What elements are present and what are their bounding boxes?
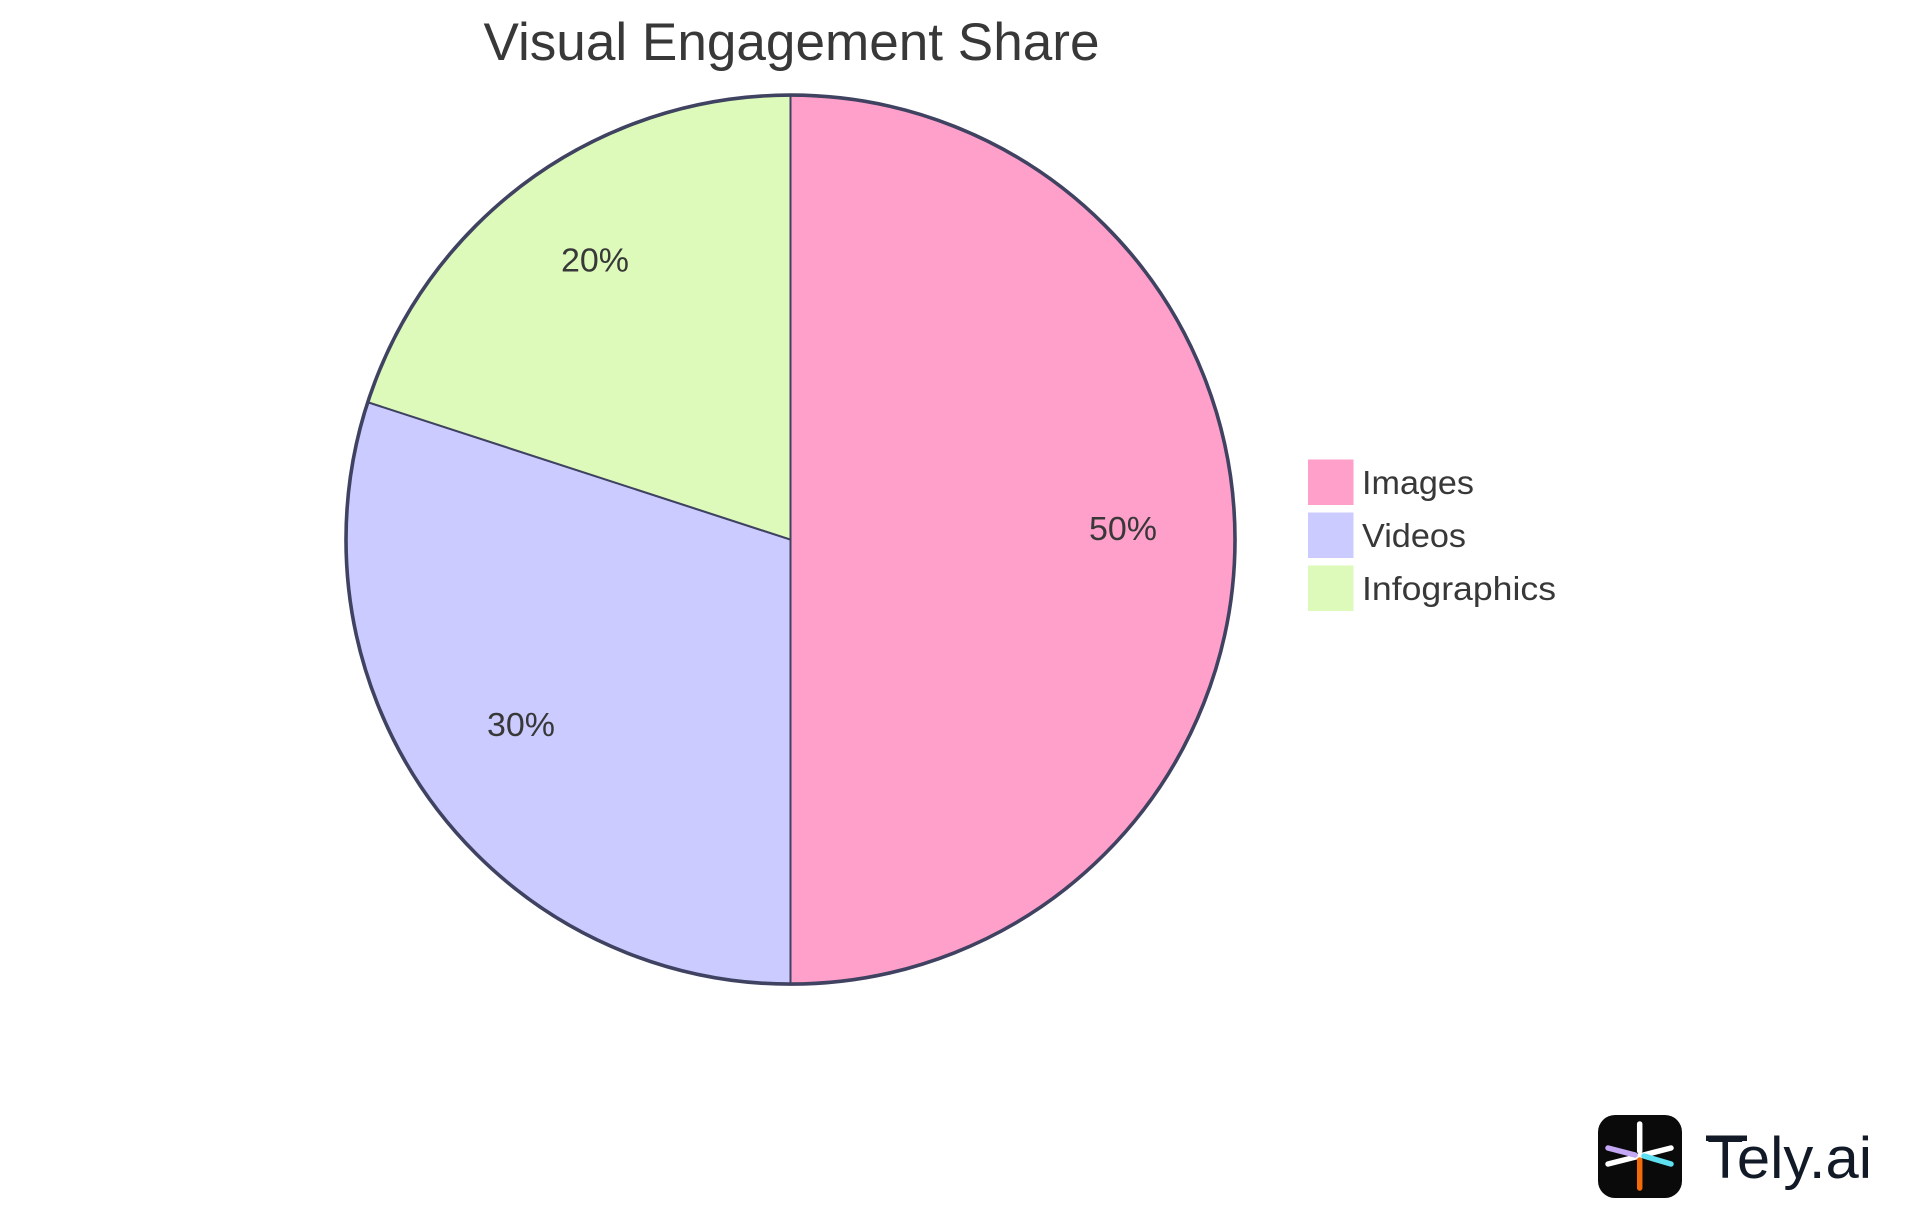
legend item: Infographics	[1308, 566, 1556, 611]
slice: Infographics 20%	[368, 95, 790, 540]
logo: Tely.ai	[1598, 1115, 1872, 1198]
legend item: Videos	[1308, 512, 1466, 558]
label: 30%: 30%	[487, 707, 555, 744]
slice: Videos 30%	[346, 402, 790, 984]
title: Visual Engagement Share	[484, 13, 1100, 72]
legend item: Images: Images	[1362, 465, 1474, 502]
label: 50%: 50%	[1089, 511, 1157, 548]
slice: Images 50%	[790, 95, 1235, 984]
legend item: Videos: Videos	[1362, 518, 1466, 555]
pie chart	[346, 95, 1235, 984]
wordmark: Tely.ai	[1707, 1126, 1872, 1191]
legend	[1308, 460, 1556, 611]
pie outer ring	[346, 95, 1235, 984]
legend item: Infographics: Infographics	[1362, 571, 1556, 608]
legend item: Images	[1308, 460, 1474, 505]
icon: logo tile	[1598, 1115, 1682, 1198]
label: 20%: 20%	[561, 242, 629, 280]
